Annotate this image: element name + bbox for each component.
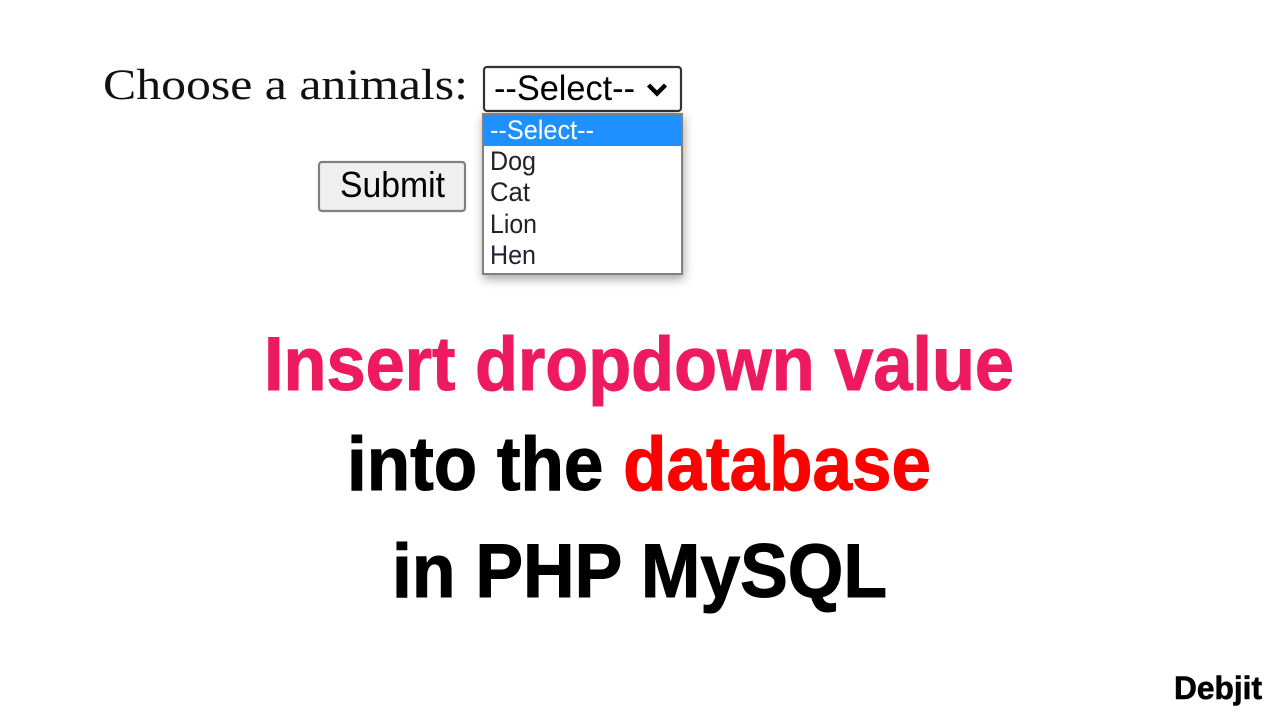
select box <box>484 67 681 111</box>
select box: --Select-- <box>494 69 635 108</box>
heading line 1: Insert dropdown value <box>264 322 1014 407</box>
form demo screenshot <box>103 62 682 274</box>
option: Cat: Cat <box>490 177 530 207</box>
highlighted option <box>484 115 681 146</box>
heading line 3: in PHP MySQL <box>392 529 887 614</box>
form label: Choose a animals: Choose a animals: <box>103 62 468 109</box>
brand: Debjit: Debjit <box>1174 670 1262 706</box>
title <box>264 322 1014 614</box>
submit button <box>319 162 465 211</box>
option: Dog: Dog <box>490 146 536 176</box>
option: Lion: Lion <box>490 209 537 239</box>
icon: dropdown chevron <box>648 85 666 94</box>
dropdown list <box>483 114 682 274</box>
highlighted option: --Select-- <box>490 115 594 145</box>
heading line 2: into the database <box>347 422 931 507</box>
option: Hen: Hen <box>490 240 536 270</box>
submit button: Submit <box>340 164 445 205</box>
